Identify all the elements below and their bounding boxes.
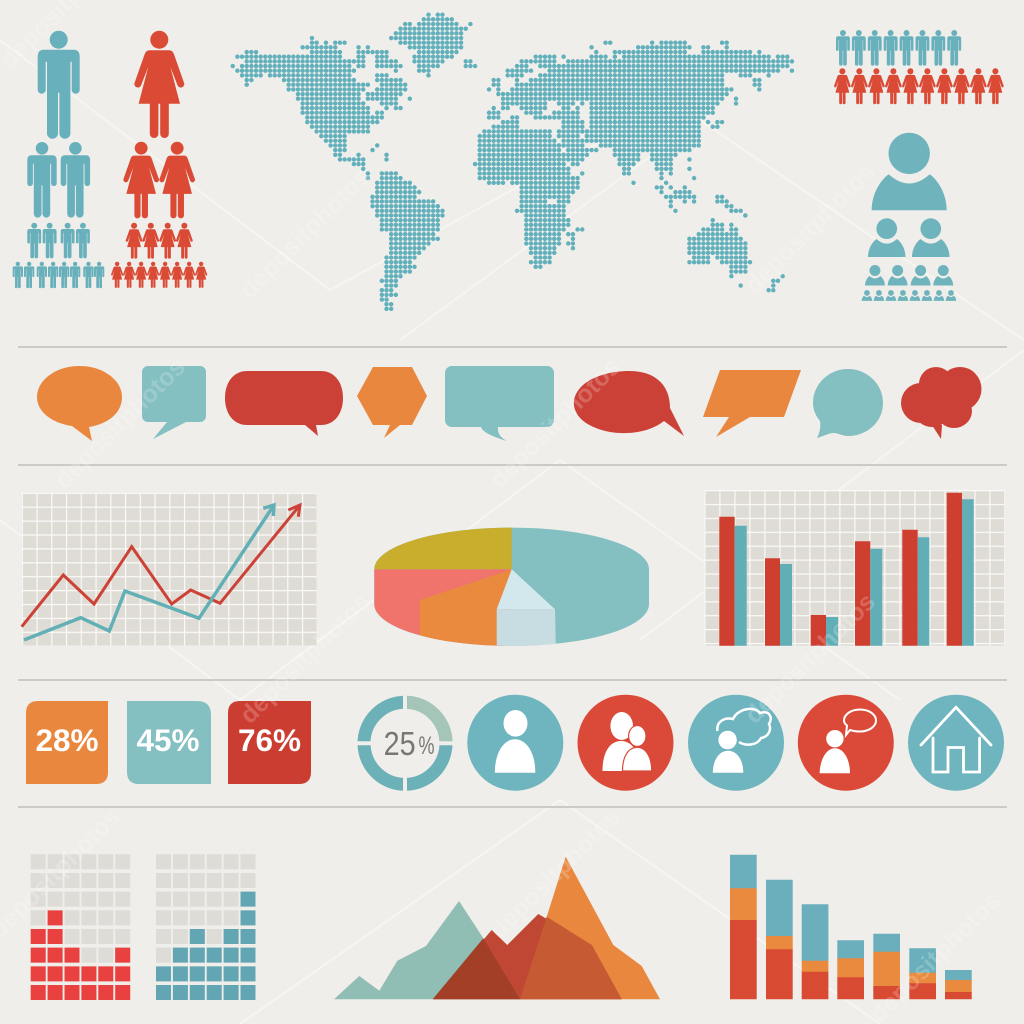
watermark: depositphotos [864, 887, 1006, 1024]
icon: single person [467, 695, 563, 791]
ring gauge 25%: 25 [384, 725, 416, 762]
3D pie chart [374, 528, 649, 646]
bubble: teal wide rectangle [445, 366, 554, 441]
people pyramid: women [111, 31, 207, 288]
mountain: orange [520, 857, 660, 999]
percent tile: 45%: 45% [136, 722, 200, 758]
bubble: orange parallelogram [703, 370, 801, 437]
watermark: depositphotos [484, 353, 626, 494]
watermark: depositphotos [49, 353, 191, 494]
icon: house [908, 695, 1004, 791]
icon: person with speech bubble [798, 695, 894, 791]
watermark: depositphotos [234, 588, 376, 729]
pie slice: coral [374, 569, 512, 646]
bubble: orange oval [37, 366, 122, 441]
bubble: red cloud [901, 367, 982, 439]
speech bubbles row [37, 366, 982, 441]
bubble: teal rounded square [142, 366, 206, 439]
percent tile: 28%: 28% [35, 722, 99, 758]
percent tile: 45% [127, 701, 211, 784]
teal line with arrow [24, 505, 274, 640]
watermark: depositphotos [739, 158, 881, 299]
percent tile: 28% [26, 701, 108, 784]
pie slice: yellow [374, 528, 512, 570]
line chart [22, 493, 317, 646]
stacked bar chart [730, 855, 972, 999]
row of men, top right [836, 30, 961, 66]
pie slice: pale blue side [496, 609, 556, 646]
overlap: red and teal [433, 938, 520, 999]
block chart: teal [164, 854, 248, 1000]
mountain: red [433, 914, 622, 999]
pie slice: pale blue top [497, 569, 555, 609]
bubble: teal oval with tail [813, 369, 883, 438]
pie slice: orange [420, 569, 512, 655]
mountain: teal [334, 901, 520, 999]
user bust pyramid [862, 133, 956, 301]
ring gauge 25%: % [418, 732, 434, 760]
row of women, top right [834, 68, 1004, 104]
bubble: red blob [574, 371, 684, 436]
icon: two people [578, 695, 674, 791]
bubble: orange hexagon [357, 367, 427, 438]
overlap: red and orange [520, 917, 622, 999]
watermark: depositphotos [739, 588, 881, 729]
bar chart [704, 490, 1005, 646]
mountain area chart [334, 857, 660, 999]
icon: person with thought cloud [688, 695, 784, 791]
bubble: red wide rounded [225, 371, 343, 436]
red line with arrow [22, 505, 300, 627]
ring gauge 25% [352, 690, 458, 797]
percent tile: 76%: 76% [238, 722, 301, 758]
dotted world map [233, 15, 792, 309]
watermark: depositphotos [484, 803, 626, 944]
percent tile: 76% [228, 701, 311, 784]
block chart: red [38, 854, 123, 1000]
watermark: depositphotos [234, 163, 376, 304]
people pyramid: men [13, 31, 104, 288]
